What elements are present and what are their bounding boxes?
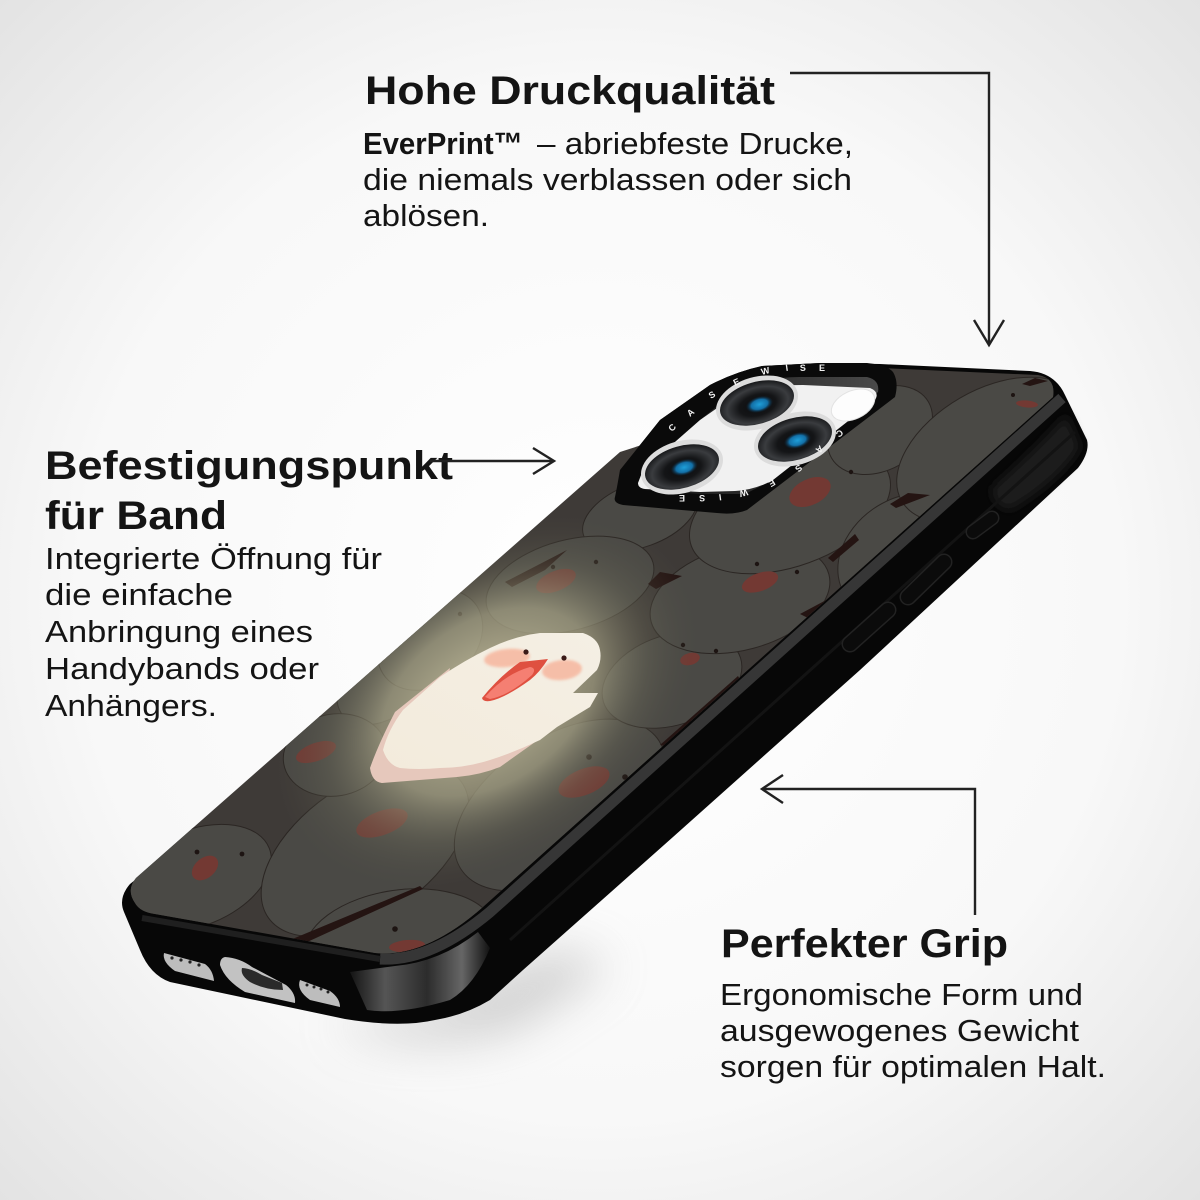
arrow bbox=[790, 73, 1004, 345]
camera plate bbox=[638, 385, 877, 492]
heading: Perfekter Grip bbox=[721, 922, 1008, 966]
charging port opening bbox=[242, 968, 283, 990]
ghost mouths bbox=[187, 400, 1038, 954]
main ghost eyes bbox=[523, 649, 567, 661]
body text: ablösen. bbox=[363, 198, 489, 233]
ghost eyes bbox=[195, 393, 1015, 932]
heading: Hohe Druckqualität bbox=[365, 69, 775, 113]
artwork base bbox=[130, 368, 1054, 954]
body text bbox=[45, 541, 382, 723]
heading: für Band bbox=[45, 494, 227, 538]
ghost crowd bbox=[130, 363, 1054, 1002]
charging port bbox=[220, 957, 295, 1003]
side button: silent switch bbox=[973, 518, 992, 532]
body text: Anbringung eines bbox=[45, 614, 313, 649]
heading: Befestigungspunkt bbox=[45, 444, 453, 488]
body text: Ergonomische Form und bbox=[720, 977, 1083, 1012]
lens left bbox=[634, 430, 730, 504]
camera island bbox=[615, 363, 897, 514]
brand text upper: CASEWISE bbox=[666, 363, 825, 433]
camera ring bbox=[615, 363, 897, 514]
phone case bbox=[100, 340, 1108, 1024]
side button: volume up bbox=[908, 562, 944, 597]
back face artwork bbox=[130, 368, 1054, 954]
lens top bbox=[709, 366, 805, 440]
case body bbox=[122, 363, 1088, 1024]
body text: ausgewogenes Gewicht bbox=[720, 1013, 1079, 1048]
arrow bbox=[430, 448, 554, 474]
arrow bbox=[762, 775, 975, 915]
body text: die niemals verblassen oder sich bbox=[363, 162, 852, 197]
glowing main ghost bbox=[370, 633, 601, 783]
lens right bbox=[747, 402, 843, 476]
right speaker bbox=[299, 980, 340, 1007]
main ghost cheek right bbox=[541, 658, 583, 682]
flash bbox=[826, 383, 880, 427]
central glow bbox=[302, 537, 683, 868]
inner side line bbox=[510, 432, 1075, 940]
heading bbox=[45, 444, 453, 538]
bottom rim highlight bbox=[142, 918, 380, 959]
body text: – abriebfeste Drucke, bbox=[537, 126, 853, 161]
phone cast shadow bbox=[330, 950, 610, 1040]
main ghost mouth tongue bbox=[485, 667, 534, 699]
body text bbox=[720, 977, 1106, 1084]
callout: grip bbox=[720, 775, 1106, 1084]
main ghost cheek left bbox=[483, 647, 531, 669]
callout: print quality bbox=[363, 69, 1004, 345]
camera ring inner shade bbox=[640, 377, 878, 494]
body text bbox=[363, 126, 853, 233]
glossy bottom corner bbox=[350, 932, 490, 1011]
bottom ports bbox=[164, 953, 340, 1007]
main ghost pink underside bbox=[370, 668, 545, 783]
main ghost mouth bbox=[482, 659, 548, 701]
side button: volume down bbox=[850, 610, 888, 644]
body text: Handybands oder bbox=[45, 651, 319, 686]
body text: die einfache bbox=[45, 577, 233, 612]
callout: strap attachment bbox=[45, 444, 554, 723]
body text: Integrierte Öffnung für bbox=[45, 541, 382, 576]
side rim highlight bbox=[380, 398, 1062, 959]
main ghost body bbox=[383, 633, 601, 769]
brand text lower: CASEWISE bbox=[679, 427, 845, 503]
body text: Anhängers. bbox=[45, 688, 217, 723]
dark gaps between ghosts bbox=[290, 378, 1048, 943]
left speaker bbox=[164, 953, 214, 981]
body text: sorgen für optimalen Halt. bbox=[720, 1049, 1106, 1084]
body text: EverPrint™ bbox=[363, 126, 523, 161]
side reflection top right bbox=[993, 415, 1080, 510]
